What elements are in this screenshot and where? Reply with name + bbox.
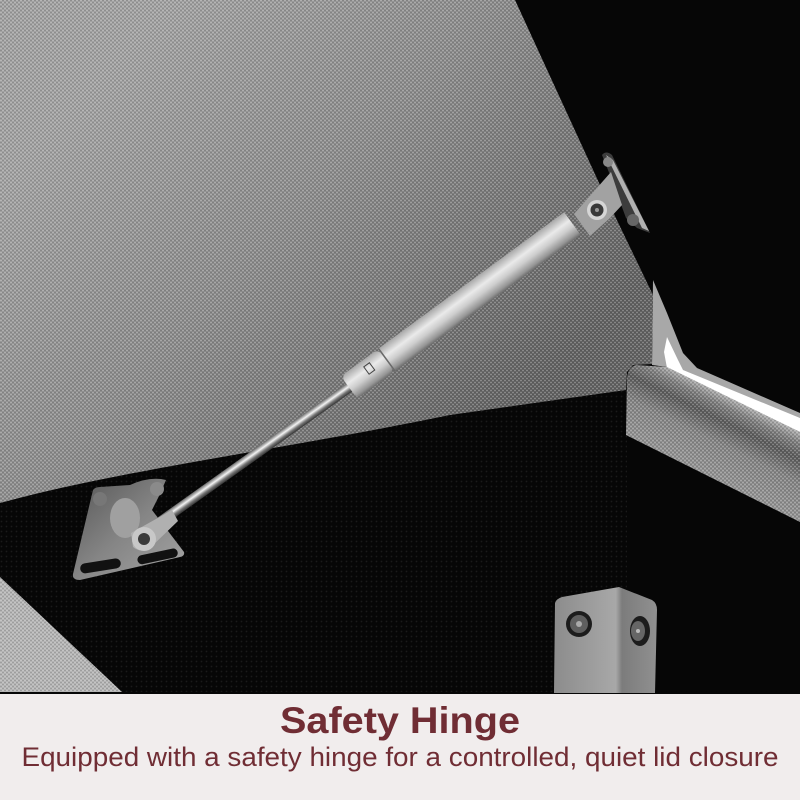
cylinder marking <box>364 363 375 374</box>
plate screw left <box>93 492 107 506</box>
gas spring cylinder <box>341 212 581 399</box>
upper mounting plate <box>574 152 650 236</box>
lid side edge and gap strip <box>652 280 800 432</box>
plate screw right <box>150 482 164 496</box>
subtitle: Equipped with a safety hinge for a controlled, quiet lid closure <box>22 742 778 772</box>
pivot boss <box>110 498 140 538</box>
gas spring piston rod <box>157 379 359 526</box>
plate screw bottom <box>627 214 639 226</box>
upper screw <box>587 200 607 220</box>
metal corner bracket <box>554 587 657 693</box>
interior dark fabric texture <box>0 390 627 692</box>
bracket screw left <box>566 611 592 637</box>
title: Safety Hinge <box>280 700 520 741</box>
bracket screw right <box>630 616 650 646</box>
lower mounting plate <box>73 479 184 580</box>
plate slot right <box>137 548 179 565</box>
white gap highlight <box>664 337 800 432</box>
box rim, upholstered <box>626 365 800 522</box>
upholstered lid <box>0 0 653 503</box>
caption band <box>0 694 800 800</box>
rod end eyelet <box>131 510 178 551</box>
plate slot left <box>79 558 122 574</box>
lower left upholstered arm <box>0 577 122 692</box>
plate screw top <box>603 157 613 167</box>
